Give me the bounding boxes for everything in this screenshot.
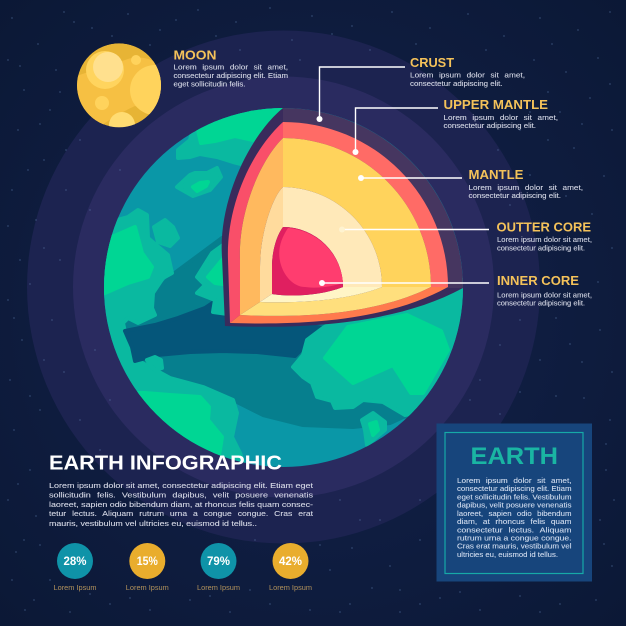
- label: crust: CRUST: [410, 55, 454, 70]
- leader line: outer core: [339, 226, 489, 232]
- earth cross-section: [222, 108, 463, 327]
- intro paragraph: [49, 481, 314, 528]
- panel text: consectetur adipiscing elit. Etiam: [457, 484, 572, 493]
- atmosphere edge behind cut: [283, 108, 463, 288]
- inner core: [272, 227, 343, 296]
- label: crust: [410, 55, 525, 88]
- moon: [77, 43, 161, 128]
- land near cut bright: [206, 258, 224, 286]
- label: upper mantle: UPPER MANTLE: [444, 97, 548, 112]
- island small south: [147, 357, 162, 370]
- cut shadow: [222, 108, 463, 327]
- outer core layer: [260, 187, 382, 302]
- panel text: dapibus, velit posuere venenatis: [457, 501, 572, 510]
- panel: earth: [436, 424, 592, 582]
- title: EARTH INFOGRAPHIC: [49, 452, 282, 474]
- leader line: crust: [316, 67, 405, 122]
- panel text: Cras erat mauris, vestibulum vel: [457, 542, 572, 551]
- top land: [176, 108, 278, 166]
- mantle layer: [240, 138, 431, 316]
- left bright land: [100, 227, 152, 295]
- ocean shadow band: [125, 236, 438, 429]
- panel text: laoreet, sapien odio bibendum: [457, 509, 572, 518]
- island south east bright: [370, 422, 378, 435]
- label: outter core: Lorem ipsum dolor sit amet,: [497, 235, 592, 244]
- panel text: Lorem ipsum dolor sit amet,: [457, 476, 572, 485]
- island west: [154, 220, 178, 246]
- stat: 28%: Lorem Ipsum: [54, 585, 97, 592]
- left land: [100, 210, 247, 475]
- label: outter core: consectetur adipiscing elit.: [497, 243, 585, 252]
- panel text: eget sollicitudin felis. Vestibulum: [457, 492, 572, 502]
- stat: 15%: [126, 543, 169, 592]
- atmosphere halos: [27, 30, 540, 544]
- label: mantle: MANTLE: [468, 167, 524, 182]
- leader line: mantle: [358, 175, 462, 181]
- stat: 42%: Lorem Ipsum: [269, 585, 312, 592]
- label: outter core: [496, 220, 592, 252]
- label: mantle: [468, 167, 583, 200]
- label: inner core: [497, 273, 592, 308]
- intro paragraph: laoreet, sapien odio bibendum diam, at rhoncus felis quam consec-: [49, 500, 314, 509]
- panel text: rutrum urna a congue congue.: [457, 534, 572, 542]
- label: moon: [174, 48, 288, 88]
- intro paragraph: tetur lectus. Aliquam rutrum urna a congue congue. Cras erat: [49, 509, 313, 518]
- label: moon: eget sollicitudin felis.: [174, 79, 246, 88]
- planet earth: [100, 98, 470, 475]
- leader line: upper mantle: [352, 108, 438, 155]
- crust layer: [228, 122, 448, 323]
- panel text: consectetur lectus. Aliquam: [457, 525, 572, 534]
- stat: 79%: [197, 543, 240, 592]
- label: upper mantle: [444, 97, 558, 130]
- island north: [177, 168, 221, 196]
- stat: 79%: 79%: [207, 556, 230, 568]
- right land bright: [325, 315, 448, 393]
- intro paragraph: Lorem ipsum dolor sit amet, consectetur adipiscing elit. Etiam eget: [49, 481, 313, 490]
- label: crust: Lorem ipsum dolor sit amet,: [410, 70, 525, 80]
- stat: 28%: 28%: [64, 556, 86, 568]
- stat: 15%: Lorem Ipsum: [126, 585, 169, 592]
- label: upper mantle: Lorem ipsum dolor sit amet,: [444, 113, 558, 122]
- stat: 15%: 15%: [137, 556, 158, 568]
- label: inner core: INNER CORE: [497, 273, 579, 288]
- panel text: ultricies eu, euismod id tellus.: [457, 550, 558, 559]
- stat: 42%: 42%: [279, 556, 302, 568]
- panel text: [457, 476, 572, 559]
- label: mantle: consectetur adipiscing elit.: [468, 191, 561, 200]
- island south east: [362, 413, 385, 445]
- island north bright: [193, 182, 208, 191]
- intro paragraph: mauris, vestibulum vel ultricies eu, euismod id tellus..: [49, 519, 257, 528]
- top land bright: [196, 108, 283, 145]
- label: moon: consectetur adipiscing elit. Etiam: [174, 71, 288, 80]
- land near cut: [195, 244, 224, 316]
- label: inner core: Lorem ipsum dolor sit amet,: [497, 290, 592, 299]
- label: crust: consectetur adipiscing elit.: [410, 79, 502, 88]
- darkest band: [125, 300, 323, 361]
- right land: [293, 280, 470, 415]
- label: upper mantle: consectetur adipiscing elit.: [444, 121, 536, 130]
- label: moon: MOON: [174, 48, 216, 62]
- label: inner core: consectetur adipiscing elit.: [497, 299, 585, 308]
- stat: 79%: Lorem Ipsum: [197, 585, 240, 592]
- panel text: diam, at rhoncus felis quam: [457, 517, 572, 526]
- lower left bright land: [137, 391, 224, 456]
- panel heading: EARTH: [470, 443, 558, 470]
- label: mantle: Lorem ipsum dolor sit amet,: [468, 183, 583, 192]
- intro paragraph: sollicitudin felis. Vestibulum dapibus, velit posuere venenatis: [49, 490, 313, 499]
- stat: 28%: [54, 543, 97, 592]
- ocean: [100, 100, 470, 470]
- leader line: inner core: [319, 280, 489, 286]
- label: outter core: OUTTER CORE: [496, 220, 591, 234]
- label: moon: Lorem ipsum dolor sit amet,: [174, 62, 288, 72]
- stat: 42%: [269, 543, 312, 592]
